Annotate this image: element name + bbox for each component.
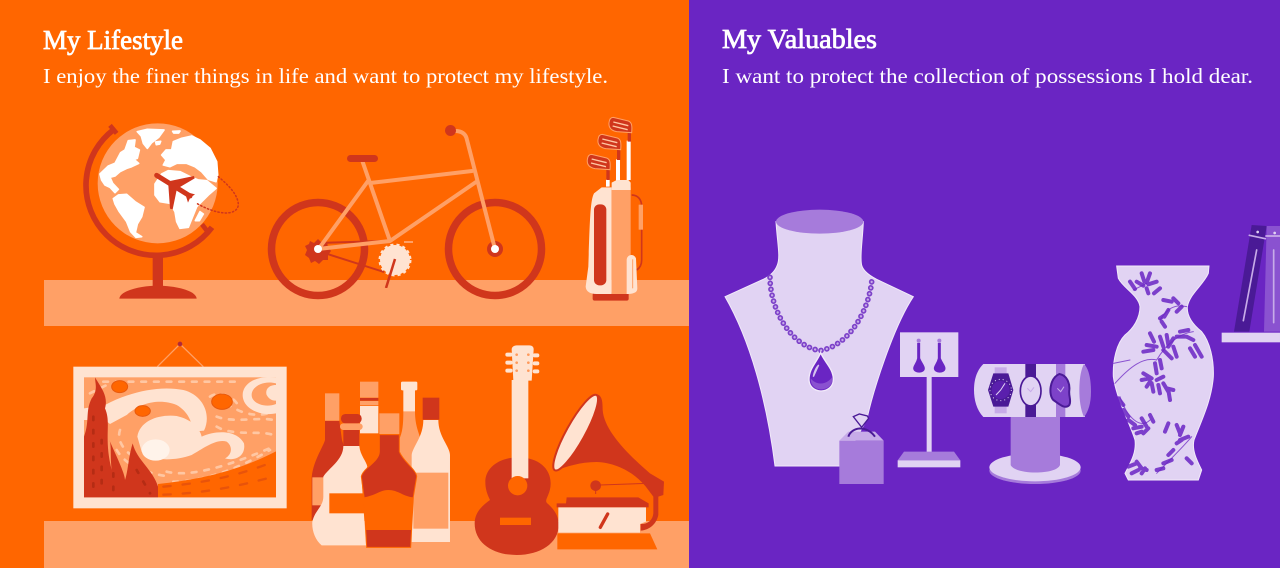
upper shelf [44,280,689,326]
necklace beads [770,277,872,351]
icon: globe with plane [86,123,238,299]
heading: my lifestyle: My Lifestyle [43,25,183,55]
heading: my valuables: My Valuables [722,24,877,54]
icon: books on shelf [1222,225,1280,342]
lower shelf [44,521,689,568]
icon: framed painting [73,342,287,508]
icon: earrings on stand [898,332,960,467]
text: valuables description: I want to protect the collection of possessions I hold dear. [722,64,1253,88]
icon: golf bag [586,117,643,301]
vase floral pattern [1113,273,1202,473]
icon: necklace on bust [725,210,913,466]
text: lifestyle description: I enjoy the finer things in life and want to protect my lifestyle. [43,64,608,88]
panel: my valuables [689,0,1280,568]
painting swirl [84,389,244,459]
icon: gramophone [547,391,664,549]
icon: acoustic guitar [475,345,559,555]
icon: watch stand [974,364,1091,484]
icon: wine and spirit bottles [312,382,450,547]
icon: ring box [839,414,884,484]
pendant [809,353,833,391]
icon: floral vase [1113,266,1213,480]
panel: my lifestyle [0,0,689,568]
icon: bicycle [272,125,542,296]
